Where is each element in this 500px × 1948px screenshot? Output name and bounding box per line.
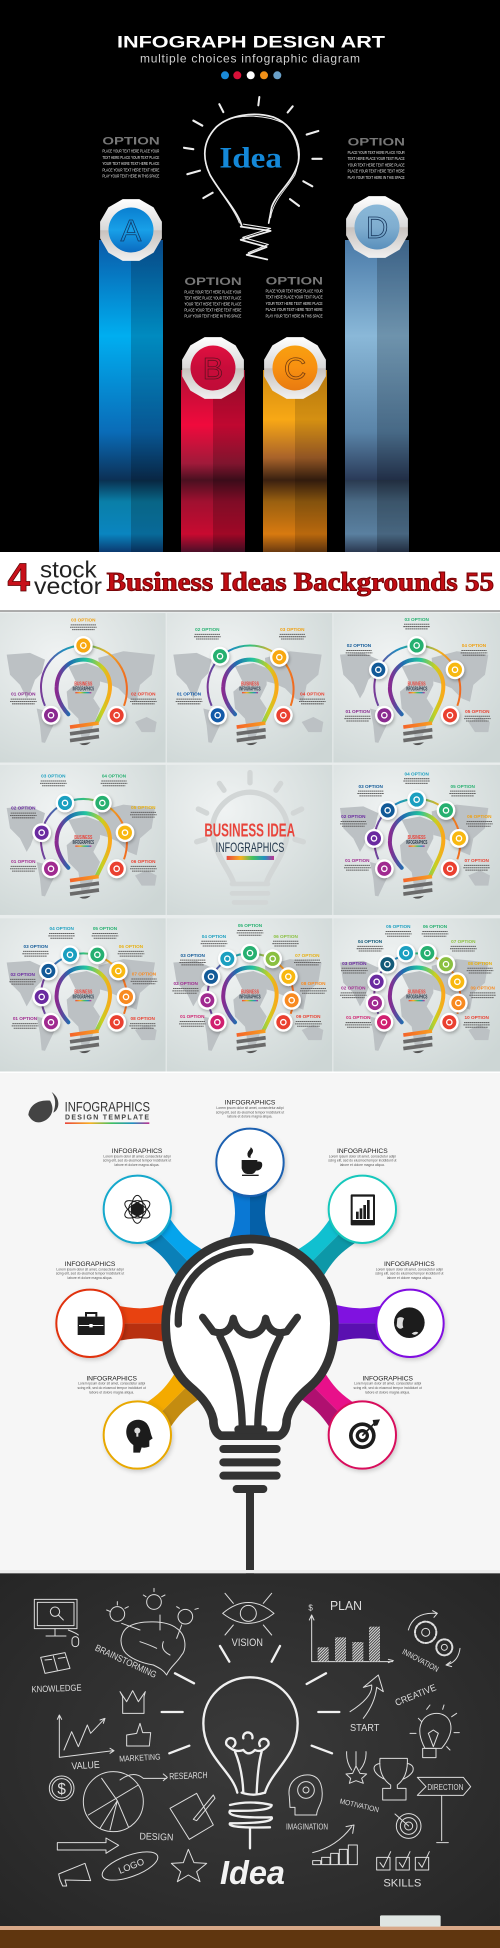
label: lower left <box>78 1375 146 1394</box>
option: upper left, atom <box>104 1176 215 1288</box>
label: upper right: Lorem ipsum dolor sit amet, consectetur adipi <box>329 1154 396 1158</box>
thumbnail 9: 02 OPTION <box>341 985 366 991</box>
thumbnail 8 <box>167 918 332 1071</box>
option C text: TEXT HERE PLACE YOUR TEXT PLACE <box>266 295 323 300</box>
icon: coffee cup <box>242 1147 262 1176</box>
thumbnail 9: 06 OPTION <box>423 924 448 929</box>
thumbnail 4: BUSINESS <box>74 835 93 841</box>
label: right: INFOGRAPHICS <box>384 1261 435 1268</box>
thumbnail 7: 04 OPTION <box>49 926 74 931</box>
label: lower right: labore et dolore magna aliqua. <box>365 1390 410 1394</box>
thumbnail 3: 05 OPTION <box>465 709 490 714</box>
thumbnail 9: 05 OPTION <box>386 924 411 929</box>
doodle: start arrow <box>350 1675 383 1718</box>
thumbnail 4: 03 OPTION <box>41 774 66 779</box>
thumbnail 6: 02 OPTION <box>341 814 366 819</box>
label value: VALUE <box>71 1760 100 1772</box>
label marketing: MARKETING <box>119 1752 161 1764</box>
thumbnail 9: 04 OPTION <box>358 939 383 944</box>
label vision: VISION <box>232 1637 263 1649</box>
thumbnail 9: BUSINESS <box>408 990 426 996</box>
option: lower right, target <box>285 1359 396 1469</box>
thumbnail 9: 01 OPTION <box>346 1015 371 1020</box>
icon: grey bulb <box>197 773 303 902</box>
option C text: OPTION <box>266 276 323 288</box>
icon: chalk bulb <box>162 1646 339 1848</box>
option: upper right, tablet <box>285 1176 396 1288</box>
badge C: C <box>284 351 306 386</box>
label: right <box>375 1261 444 1280</box>
label: top: Lorem ipsum dolor sit amet, consectetur adipi <box>216 1106 284 1110</box>
column A <box>99 240 163 552</box>
thumbnail 4: 05 OPTION <box>131 805 156 810</box>
option B text: TEXT HERE PLACE YOUR TEXT PLACE <box>184 295 241 300</box>
label: lower right: INFOGRAPHICS <box>362 1375 414 1382</box>
thumbnail 4: INFOGRAPHICS <box>73 840 94 846</box>
logo subtitle: DESIGN TEMPLATE <box>65 1114 149 1121</box>
label design: DESIGN <box>139 1831 174 1844</box>
label: upper left: INFOGRAPHICS <box>112 1148 163 1155</box>
thumbnail 2: BUSINESS <box>241 682 259 688</box>
doodle: crown <box>120 1691 145 1713</box>
title: INFOGRAPH DESIGN ART <box>117 34 385 52</box>
thumbnail 7: 05 OPTION <box>93 926 118 931</box>
label direction: DIRECTION <box>427 1783 464 1792</box>
icon: atom <box>122 1195 152 1223</box>
thumbnail 4 <box>0 765 166 915</box>
doodle: plan bar chart <box>309 1615 393 1663</box>
label: right: labore et dolore magna aliqua. <box>387 1276 432 1280</box>
heading: Business Ideas Backgrounds 55 <box>107 566 494 597</box>
label imagination: IMAGINATION <box>286 1821 328 1831</box>
icon: target <box>349 1419 380 1449</box>
thumbnail 4: 04 OPTION <box>102 774 127 779</box>
option A text: PLAY YOUR TEXT HERE IN THIS SPACE <box>102 173 159 178</box>
thumbnail 8: 05 OPTION <box>238 923 263 928</box>
thumbnail 7: BUSINESS <box>74 990 93 996</box>
thumbnail 8: 04 OPTION <box>202 934 227 939</box>
option B text: YOUR TEXT HERE TEXT HERE PLACE <box>184 301 241 307</box>
panel: dark bars infographic <box>0 0 500 552</box>
thumbnail 6: INFOGRAPHICS <box>406 840 428 846</box>
label: upper left: scing elit, sed do eiusmod tempor incididunt ut <box>103 1159 171 1163</box>
label brainstorming: BRAINSTORMING <box>93 1643 158 1680</box>
logo vector: vector <box>34 573 102 599</box>
logo number 4: 4 <box>7 556 30 600</box>
thumbnail 6: BUSINESS <box>408 835 426 841</box>
thumbnail 9 <box>333 918 500 1071</box>
label knowledge: KNOWLEDGE <box>31 1683 82 1694</box>
thumbnail 7: 08 OPTION <box>130 1016 155 1021</box>
thumbnail 6: 04 OPTION <box>404 771 429 776</box>
doodle: motivation star <box>346 1752 367 1783</box>
thumbnail 5: title card <box>167 765 332 915</box>
thumbnail 4: 06 OPTION <box>131 859 156 864</box>
doodle: innovation gears <box>408 1611 460 1667</box>
label: left: scing elit, sed do eiusmod tempor incididunt ut <box>56 1272 124 1276</box>
doodle: arrow <box>57 1838 119 1853</box>
badge D <box>346 196 408 258</box>
label: lower left: scing elit, sed do eiusmod tempor incididunt ut <box>78 1386 146 1390</box>
thumbnail 2: 04 OPTION <box>300 692 325 697</box>
thumbnail 8: 08 OPTION <box>301 981 326 986</box>
logo rainbow rule <box>65 1122 149 1124</box>
thumbnail 1: 01 OPTION <box>11 692 36 697</box>
label innovation: INNOVATION <box>401 1647 440 1674</box>
label logo: LOGO <box>117 1856 146 1876</box>
thumbnail 9: INFOGRAPHICS <box>406 995 428 1001</box>
label: upper right <box>328 1148 397 1167</box>
label: upper left <box>103 1148 171 1167</box>
thumbnail 7: 07 OPTION <box>132 972 157 977</box>
label: upper left: labore et dolore magna aliqua. <box>115 1163 160 1167</box>
option B text: PLAY YOUR TEXT HERE IN THIS SPACE <box>184 314 241 319</box>
thumbnail 1: 02 OPTION <box>131 692 156 697</box>
thumbnail 6: 01 OPTION <box>345 858 370 863</box>
label plan: PLAN <box>330 1599 362 1613</box>
doodle: skill checkboxes <box>377 1852 429 1870</box>
option C text <box>266 276 323 318</box>
label: lower right: scing elit, sed do eiusmod tempor incididunt ut <box>354 1386 422 1390</box>
thumbnail 6: 06 OPTION <box>467 814 492 819</box>
idea label: Idea <box>219 142 283 175</box>
option D text: PLACE YOUR TEXT HERE PLACE YOUR <box>348 150 405 155</box>
doodle: megaphone <box>59 1863 91 1886</box>
option: lower left, head <box>104 1359 215 1469</box>
doodle: computer and mouse <box>34 1599 79 1647</box>
label: top: labore et dolore magna aliqua. <box>228 1115 273 1119</box>
thumbnail 9: 08 OPTION <box>468 961 493 966</box>
option B text: PLACE YOUR TEXT HERE PLACE YOUR <box>184 289 242 294</box>
thumbnail 8: INFOGRAPHICS <box>239 995 261 1001</box>
logo emblem <box>28 1092 58 1122</box>
badge A <box>100 199 162 261</box>
label: left: labore et dolore magna aliqua. <box>68 1276 113 1280</box>
doodle: thumb up <box>127 1723 151 1746</box>
option C text: PLAY YOUR TEXT HERE IN THIS SPACE <box>266 313 323 318</box>
option C text: PLACE YOUR TEXT HERE PLACE YOUR <box>266 289 323 294</box>
logo stock: stock <box>40 557 97 583</box>
label: top <box>216 1100 284 1119</box>
label: left: Lorem ipsum dolor sit amet, consectetur adipi <box>56 1267 124 1271</box>
doodle: trophy <box>374 1758 413 1800</box>
column C <box>263 370 327 552</box>
panel: light bulb with seven options <box>0 1073 500 1574</box>
doodle: imagination head <box>289 1775 322 1815</box>
option A text: OPTION <box>102 136 160 148</box>
thumbnail 8: 02 OPTION <box>173 981 198 986</box>
thumbnail 1: BUSINESS <box>74 682 93 688</box>
thumbnail 8: 01 OPTION <box>180 1014 205 1019</box>
thumbnail 8: 03 OPTION <box>180 953 205 958</box>
doodle: design pad and pencil <box>170 1793 215 1839</box>
doodle: value chart <box>57 1715 114 1757</box>
thumbnail 3 <box>333 613 500 762</box>
doodle: creative bulb <box>410 1705 459 1758</box>
label: right: scing elit, sed do eiusmod tempor incididunt ut <box>375 1272 444 1276</box>
logo title: INFOGRAPHICS <box>65 1099 150 1115</box>
option B text: OPTION <box>184 277 242 288</box>
label: left: INFOGRAPHICS <box>65 1261 116 1268</box>
label: upper right: labore et dolore magna aliqua. <box>340 1163 385 1167</box>
thumbnail 2: 01 OPTION <box>177 692 202 697</box>
label: left <box>56 1261 124 1280</box>
thumbnail 3: 02 OPTION <box>347 643 372 648</box>
thumbnail 4: 01 OPTION <box>11 859 36 864</box>
doodle: logo ellipse <box>99 1846 161 1886</box>
icon: briefcase <box>78 1312 105 1335</box>
option B text: PLACE YOUR TEXT HERE TEXT HERE <box>184 307 241 313</box>
dollar axis label: $ <box>308 1604 313 1613</box>
label: lower left: Lorem ipsum dolor sit amet, consectetur adipi <box>78 1382 145 1386</box>
option D text: YOUR TEXT HERE TEXT HERE PLACE <box>348 162 405 167</box>
thumbnail 2 <box>167 613 332 762</box>
thumbnail 6: 05 OPTION <box>450 784 475 789</box>
doodle: book <box>41 1653 70 1673</box>
dollar sign: $ <box>57 1781 66 1798</box>
doodle: growth steps <box>313 1825 357 1865</box>
label: lower right: Lorem ipsum dolor sit amet, consectetur adipi <box>354 1382 421 1386</box>
option B text <box>184 277 242 319</box>
badge A: A <box>121 213 142 248</box>
thumbnail 4: 02 OPTION <box>11 806 36 811</box>
thumbnail 7: INFOGRAPHICS <box>73 995 94 1001</box>
thumbnail 2: 02 OPTION <box>195 627 220 632</box>
label: lower left: INFOGRAPHICS <box>86 1375 138 1382</box>
thumbnail 8: 07 OPTION <box>295 953 320 958</box>
thumbnail 7: 03 OPTION <box>23 944 48 949</box>
doodle: brainstorming brain and bulbs <box>107 1588 198 1675</box>
idea caption: Idea <box>220 1855 285 1892</box>
thumbnail 5: title card: INFOGRAPHICS <box>216 839 284 855</box>
label: top: scing elit, sed do eiusmod tempor incididunt ut <box>216 1110 284 1114</box>
thumbnail 9: 07 OPTION <box>451 939 476 944</box>
thumbnail 8: BUSINESS <box>241 990 259 996</box>
thumbnail 3: INFOGRAPHICS <box>406 687 428 693</box>
thumbnail 1: 03 OPTION <box>71 617 96 623</box>
option A text: YOUR TEXT HERE TEXT HERE PLACE <box>102 161 159 166</box>
option A text: PLACE YOUR TEXT HERE PLACE YOUR <box>102 149 160 154</box>
option: right, globe <box>323 1290 444 1357</box>
thumbnail 6 <box>333 765 500 915</box>
option D text: PLACE YOUR TEXT HERE TEXT HERE <box>348 169 405 174</box>
subtitle: multiple choices infographic diagram <box>140 52 360 66</box>
chalk stick <box>380 1915 441 1927</box>
option: left, briefcase <box>56 1290 177 1357</box>
label creative: CREATIVE <box>394 1682 438 1708</box>
option C text: PLACE YOUR TEXT HERE TEXT HERE <box>266 307 323 312</box>
panel: header and thumbnail grid <box>0 552 500 1071</box>
label: upper right: INFOGRAPHICS <box>337 1148 388 1155</box>
icon: globe <box>394 1307 425 1338</box>
icon: head with bulb <box>126 1420 153 1453</box>
option C text: YOUR TEXT HERE TEXT HERE PLACE <box>266 301 323 306</box>
label: upper left: Lorem ipsum dolor sit amet, consectetur adipi <box>103 1154 171 1158</box>
thumbnail 3: 01 OPTION <box>345 709 370 714</box>
icon: sketched idea bulb <box>184 97 322 259</box>
thumbnail 7: 06 OPTION <box>119 944 144 949</box>
label: lower right <box>354 1375 422 1394</box>
thumbnail 1: INFOGRAPHICS <box>73 687 94 693</box>
doodle: eye <box>223 1593 274 1635</box>
badge B: B <box>203 351 223 386</box>
label: right: Lorem ipsum dolor sit amet, consectetur adipi <box>376 1267 443 1271</box>
thumbnail 9: 09 OPTION <box>470 985 495 991</box>
column B <box>181 370 245 552</box>
doodle: pie chart <box>83 1772 167 1832</box>
thumbnail 2: 03 OPTION <box>280 627 305 632</box>
option D text: OPTION <box>348 137 405 149</box>
thumbnail 7 <box>0 918 166 1071</box>
column D <box>345 240 409 552</box>
badge D: D <box>366 210 388 245</box>
label: lower left: labore et dolore magna aliqua. <box>89 1390 134 1394</box>
icon: large bulb <box>166 1239 334 1574</box>
doodle: target <box>395 1814 421 1838</box>
option D text: TEXT HERE PLACE YOUR TEXT PLACE <box>348 156 405 161</box>
thumbnail 3: 04 OPTION <box>462 643 487 648</box>
thumbnail 2: INFOGRAPHICS <box>239 687 261 693</box>
thumbnail 3: BUSINESS <box>408 682 426 688</box>
option A text: PLACE YOUR TEXT HERE TEXT HERE <box>102 167 159 172</box>
label research: RESEARCH <box>169 1770 208 1781</box>
thumbnail 7: 01 OPTION <box>13 1016 38 1021</box>
doodle: direction sign <box>417 1777 471 1843</box>
label skills: SKILLS <box>383 1878 422 1890</box>
icon: tablet chart <box>351 1194 375 1225</box>
colour dots <box>221 71 281 79</box>
panel: chalkboard <box>0 1570 500 1948</box>
option D text <box>348 137 405 180</box>
label: top: INFOGRAPHICS <box>225 1100 276 1107</box>
thumbnail 6: 07 OPTION <box>464 858 489 863</box>
label motivation: MOTIVATION <box>339 1797 380 1814</box>
thumbnail 3: 03 OPTION <box>404 617 429 622</box>
thumbnail 6: 03 OPTION <box>358 784 383 789</box>
thumbnail 5: title card: BUSINESS IDEA <box>204 820 295 841</box>
option A text: TEXT HERE PLACE YOUR TEXT PLACE <box>102 155 159 160</box>
label: upper right: scing elit, sed do eiusmod tempor incididunt ut <box>328 1159 397 1163</box>
thumbnail 8: 06 OPTION <box>273 934 298 939</box>
thumbnail 9: 10 OPTION <box>464 1015 489 1020</box>
badge C <box>264 337 326 399</box>
label start: START <box>350 1723 380 1734</box>
option A text <box>102 136 160 178</box>
option D text: PLAY YOUR TEXT HERE IN THIS SPACE <box>348 175 405 180</box>
option: top, coffee <box>216 1129 284 1240</box>
thumbnail 7: 02 OPTION <box>10 972 35 977</box>
badge B <box>182 337 244 399</box>
thumbnail 8: 09 OPTION <box>296 1014 321 1019</box>
thumbnail 1 <box>0 613 166 762</box>
thumbnail 9: 03 OPTION <box>342 961 367 966</box>
doodle: star <box>171 1849 207 1882</box>
doodle: dollar coin <box>49 1776 74 1801</box>
